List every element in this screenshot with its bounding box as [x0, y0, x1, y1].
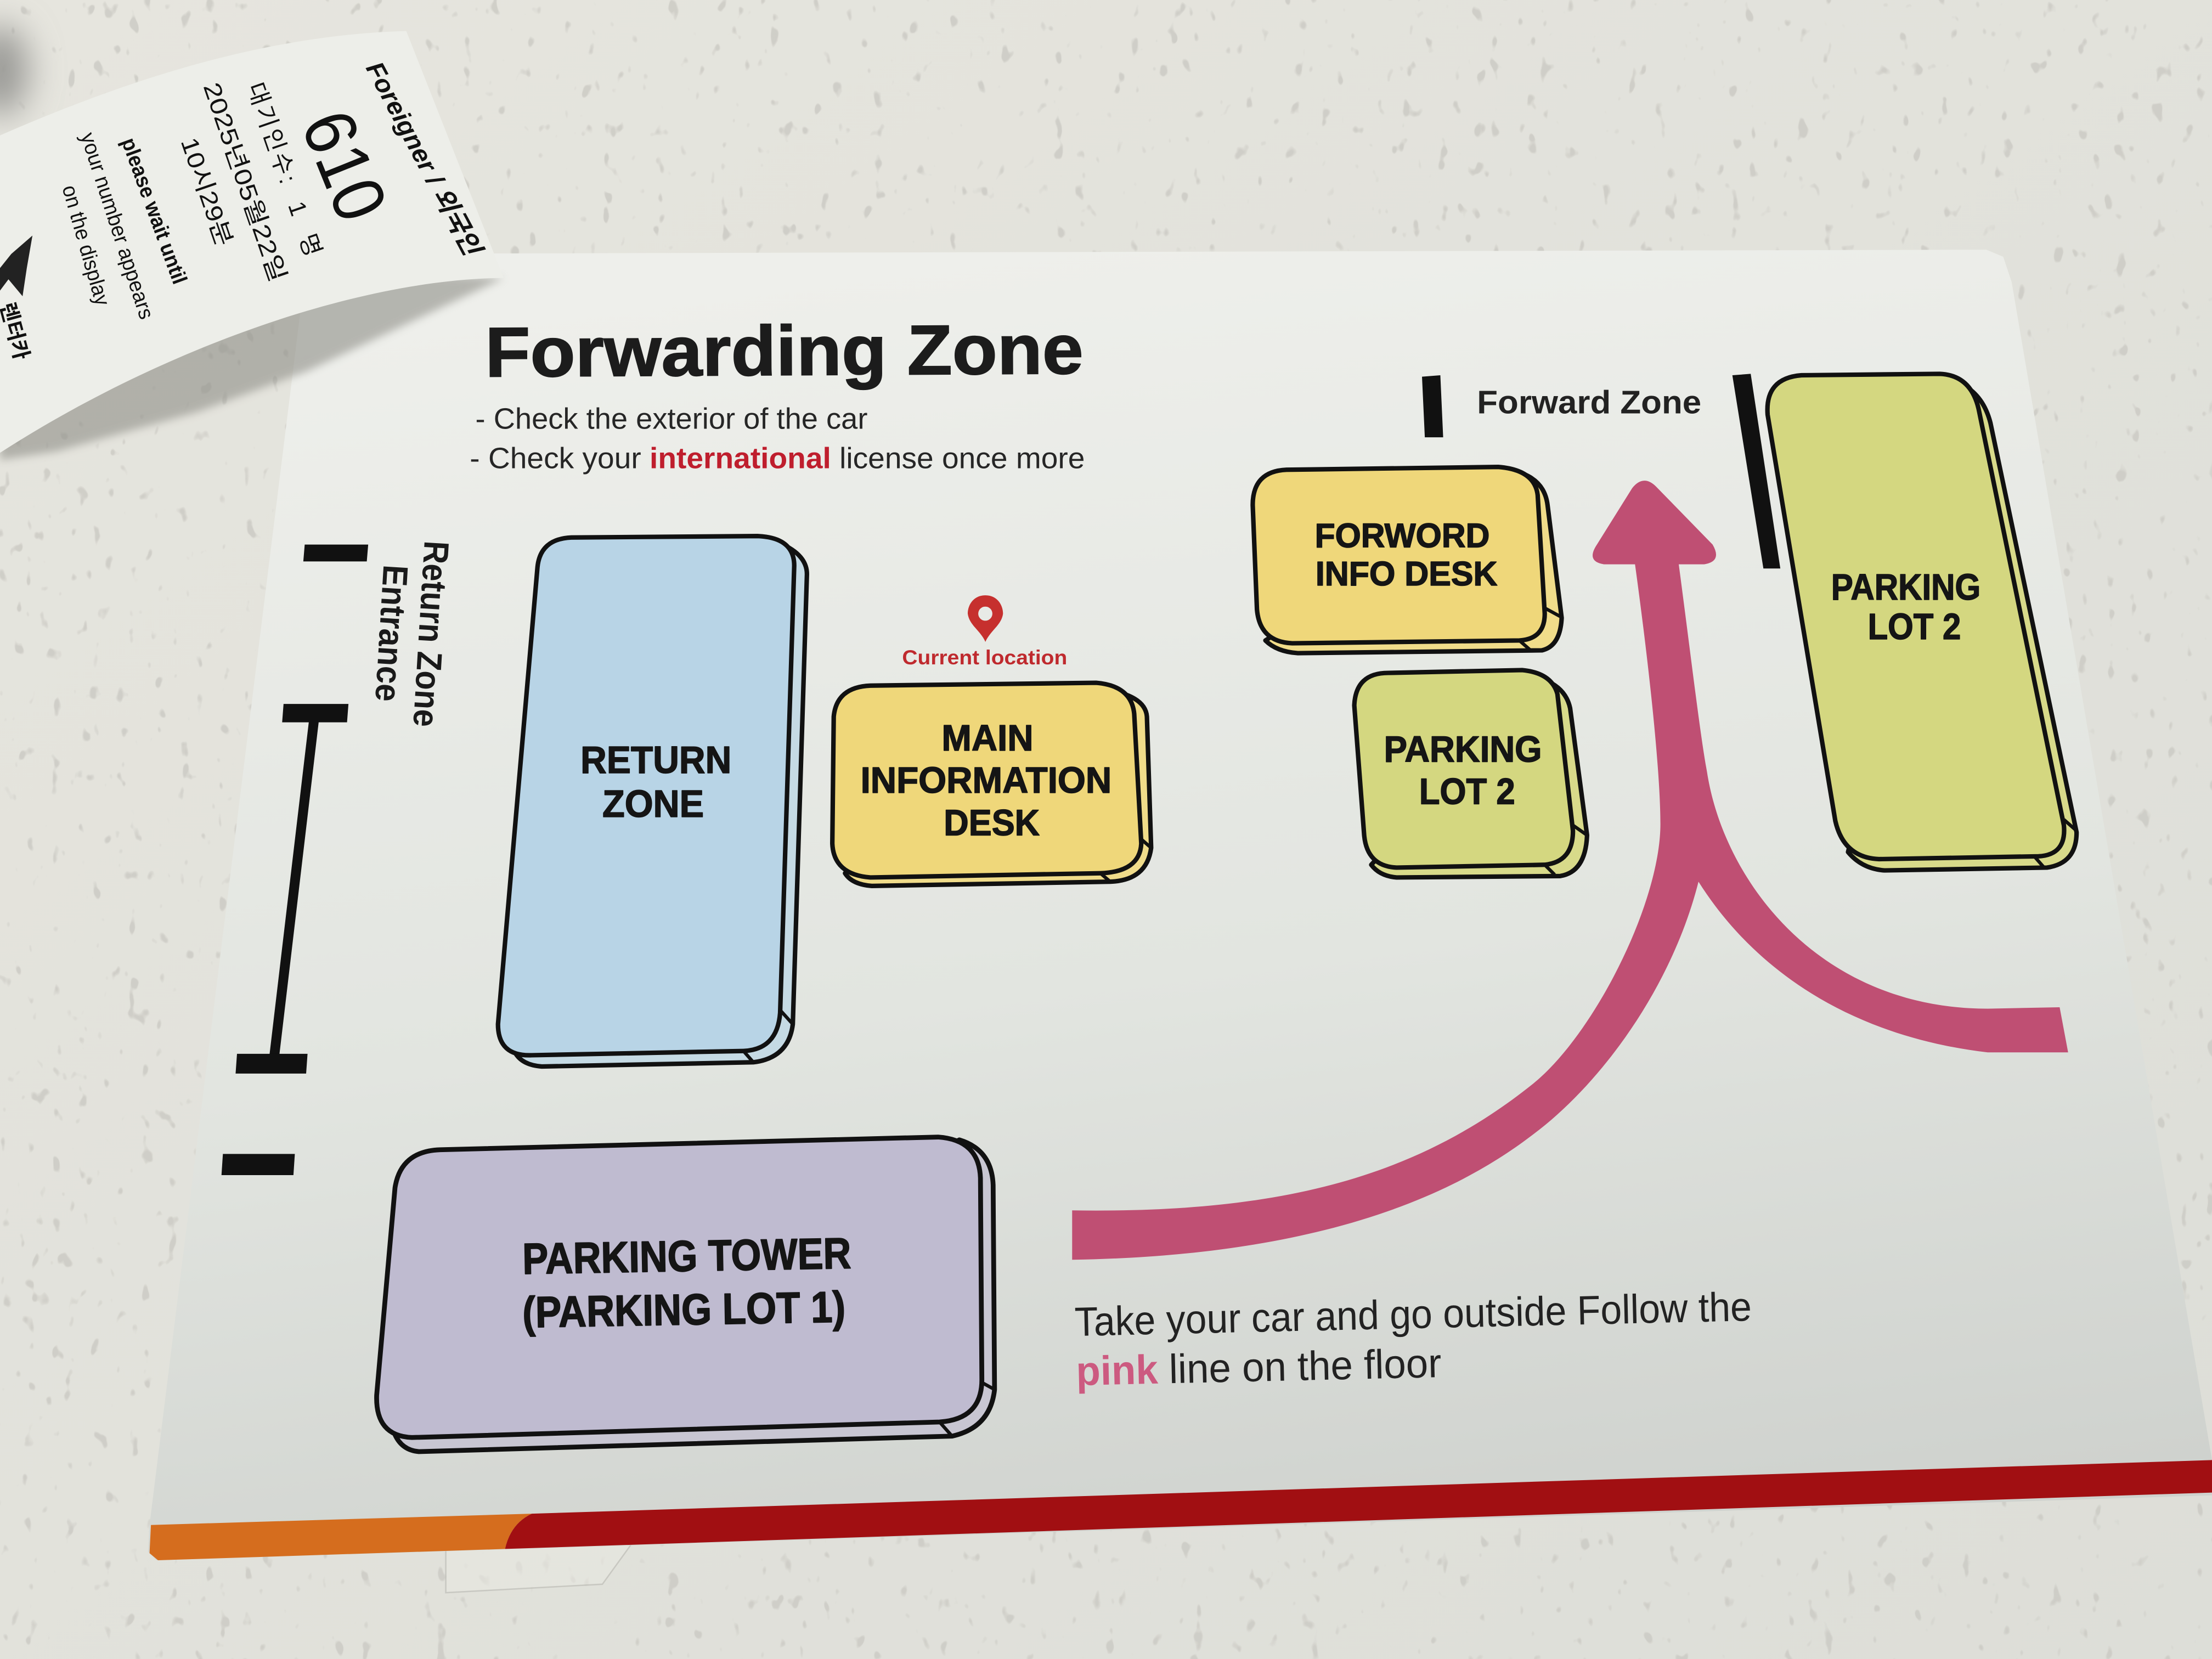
label: main information desk: INFORMATION	[861, 760, 1111, 801]
ticket text: category: Foreigner / 외국인	[360, 57, 488, 262]
footer band orange	[150, 1514, 532, 1560]
title: Forwarding Zone	[485, 311, 1084, 392]
label: return zone	[580, 738, 731, 825]
marker: lower bar	[222, 1154, 295, 1175]
label: forward info desk: INFO DESK	[1316, 555, 1498, 593]
ticket text: date: 2025년05월22일	[198, 79, 291, 285]
marker: return zone entrance span	[235, 704, 348, 1074]
ticket text: time: 10시29분	[176, 134, 238, 250]
label: return zone entrance: Return Zone	[405, 540, 456, 728]
label: forward info desk: FORWORD	[1315, 517, 1489, 555]
label: main information desk	[861, 718, 1111, 843]
label: return zone: RETURN	[580, 738, 731, 781]
label: parking lot 2 small	[1384, 729, 1542, 812]
panel: queue ticket receipt	[0, 31, 504, 453]
ticket number: 610	[286, 99, 403, 232]
label: parking lot 2 large: PARKING	[1831, 567, 1980, 608]
ticket text: waiting count: 대기인수: 1 명	[242, 79, 326, 260]
label: main information desk: DESK	[944, 802, 1040, 843]
marker: return zone top bar	[303, 545, 368, 561]
label: parking lot 2 small: LOT 2	[1419, 771, 1515, 812]
label: parking lot 2 small: PARKING	[1384, 729, 1542, 770]
label: parking tower	[522, 1229, 851, 1337]
zone: forward info desk	[1252, 467, 1562, 653]
label: forward info desk	[1315, 517, 1498, 593]
receipt shadow	[0, 268, 504, 460]
ticket text: number appears: your number appears	[76, 129, 159, 322]
label: main information desk: MAIN	[941, 718, 1034, 759]
label: forward zone: Forward Zone	[1477, 383, 1701, 420]
zone: parking tower	[376, 1137, 995, 1452]
label: return zone entrance	[368, 540, 456, 728]
icon: ticket logo	[0, 235, 32, 296]
label: return zone entrance: Entrance	[368, 564, 415, 703]
footer band red	[505, 1460, 2212, 1549]
panel: forwarding zone card	[148, 250, 2212, 1560]
text block: instructions	[470, 403, 1085, 475]
label: parking tower: PARKING TOWER	[522, 1229, 851, 1283]
text block: instructions: - Check the exterior of the car	[476, 403, 867, 436]
label: return zone: ZONE	[602, 782, 704, 825]
arrow: pink route line	[1072, 481, 2068, 1260]
zone: return zone	[498, 536, 807, 1066]
marker: forward zone right bar	[1733, 374, 1780, 568]
zone: main information desk	[832, 683, 1151, 886]
tab under card	[446, 1543, 632, 1593]
text block: follow pink line	[1074, 1283, 1752, 1394]
ticket text: please wait: please wait until	[117, 135, 191, 287]
marker: forward zone left bar	[1422, 375, 1443, 437]
text block: follow pink line: Take your car and go outside Follow the	[1074, 1283, 1752, 1345]
zone: parking lot 2 large	[1768, 374, 2076, 871]
label: parking lot 2 large: LOT 2	[1868, 606, 1961, 647]
ticket text: on the display: on the display	[57, 183, 114, 309]
text block: instructions: - Check your international license once more	[470, 442, 1085, 475]
label: parking tower: (PARKING LOT 1)	[522, 1282, 846, 1337]
icon: current location pin	[968, 595, 1003, 642]
text block: follow pink line: pink line on the floor	[1075, 1340, 1442, 1394]
zone: parking lot 2 small	[1355, 670, 1587, 877]
label: parking lot 2 large	[1831, 567, 1980, 647]
label: current location: Current location	[902, 646, 1067, 669]
